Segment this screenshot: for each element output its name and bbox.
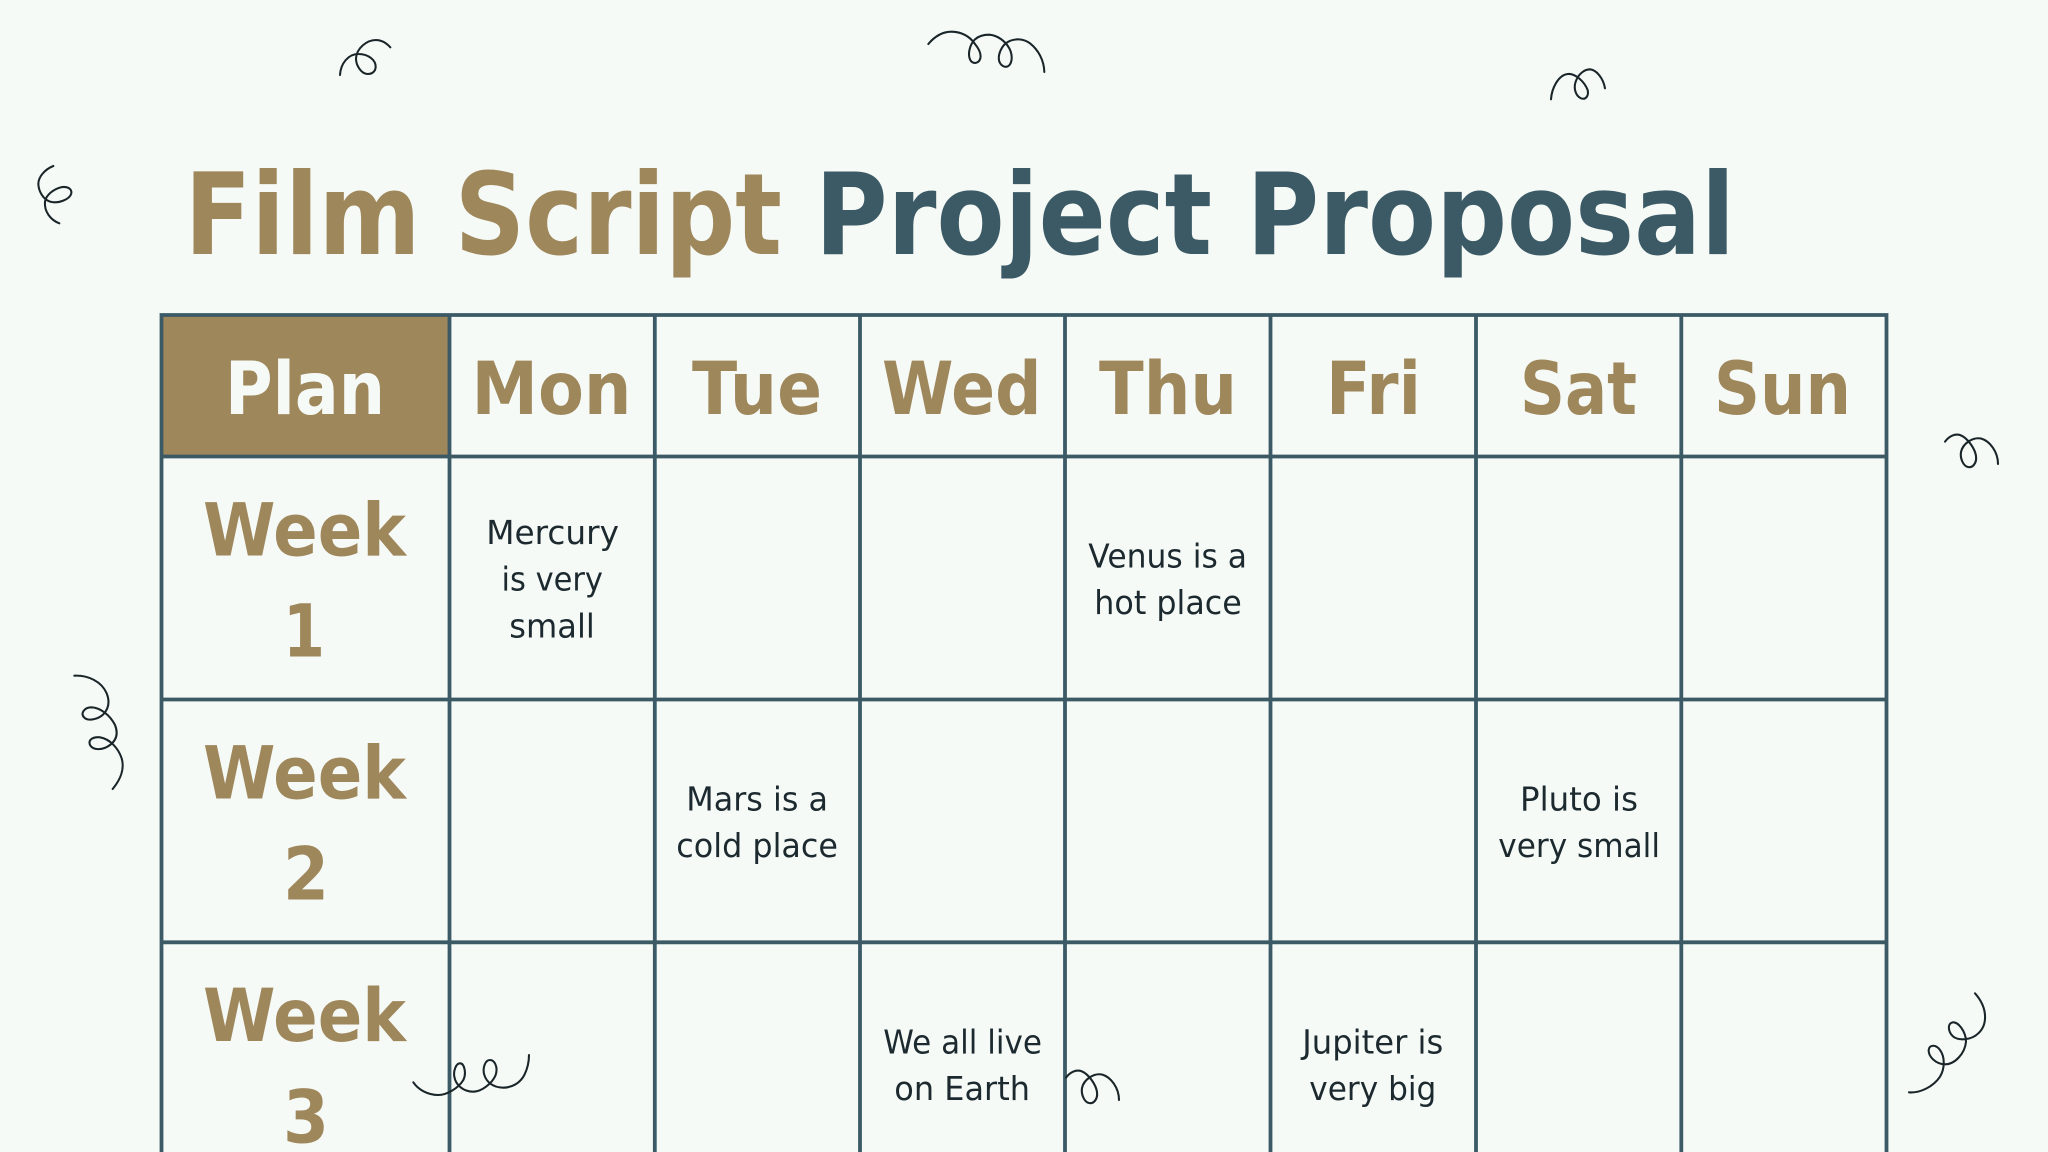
week 1 thursday note: [1088, 537, 1247, 622]
week 1 thursday note: hot place: [1094, 584, 1242, 622]
week 1 monday note: is very: [502, 561, 603, 599]
week labels: Week: [203, 974, 407, 1059]
decorative curl left of table: [74, 676, 123, 789]
decorative curl left of title: [38, 166, 71, 223]
title: Project Proposal: [815, 149, 1735, 281]
week 2 tuesday note: Mars is a: [686, 780, 828, 818]
week 1 monday note: [486, 514, 619, 645]
header row labels: Tue: [692, 347, 822, 432]
week 3 friday note: very big: [1309, 1070, 1436, 1108]
week 2 saturday note: very small: [1498, 827, 1660, 865]
week labels: 2: [283, 832, 329, 918]
decorative curl bottom right: [1909, 993, 1985, 1092]
decorative curl top left: [340, 40, 390, 75]
schedule table: [162, 315, 1886, 1152]
week 3 friday note: Jupiter is: [1300, 1023, 1443, 1061]
decorative curl bottom left: [413, 1055, 529, 1095]
week 3 wednesday note: [883, 1023, 1042, 1108]
plan header cell: [162, 315, 450, 456]
header row labels: Thu: [1099, 347, 1237, 432]
week 3 friday note: [1300, 1023, 1443, 1108]
title: [184, 149, 1735, 281]
week 1 thursday note: Venus is a: [1088, 537, 1247, 575]
header row labels: [225, 347, 1851, 432]
decorative curl right of table: [1945, 435, 1998, 467]
header row labels: Mon: [472, 347, 632, 432]
week 3 wednesday note: We all live: [883, 1023, 1042, 1061]
decorative curl top centre: [928, 32, 1044, 72]
header row labels: Sat: [1520, 347, 1637, 432]
decorative curl top right: [1551, 69, 1605, 99]
week labels: Week: [203, 731, 407, 816]
week 2 tuesday note: cold place: [676, 827, 838, 865]
title: Film Script: [184, 149, 782, 281]
header row labels: Sun: [1714, 347, 1851, 432]
week 2 saturday note: [1498, 780, 1660, 865]
week labels: 1: [283, 590, 325, 674]
week 2 saturday note: Pluto is: [1520, 780, 1638, 818]
decorative curl bottom centre: [1066, 1071, 1119, 1103]
week 1 monday note: small: [509, 607, 595, 645]
week labels: [203, 488, 407, 1152]
header row labels: Fri: [1326, 347, 1421, 432]
header row labels: Plan: [225, 347, 385, 432]
week labels: Week: [203, 488, 407, 574]
week 3 wednesday note: on Earth: [894, 1070, 1030, 1108]
week 2 tuesday note: [676, 780, 838, 865]
header row labels: Wed: [882, 347, 1042, 432]
week 1 monday note: Mercury: [486, 514, 619, 552]
